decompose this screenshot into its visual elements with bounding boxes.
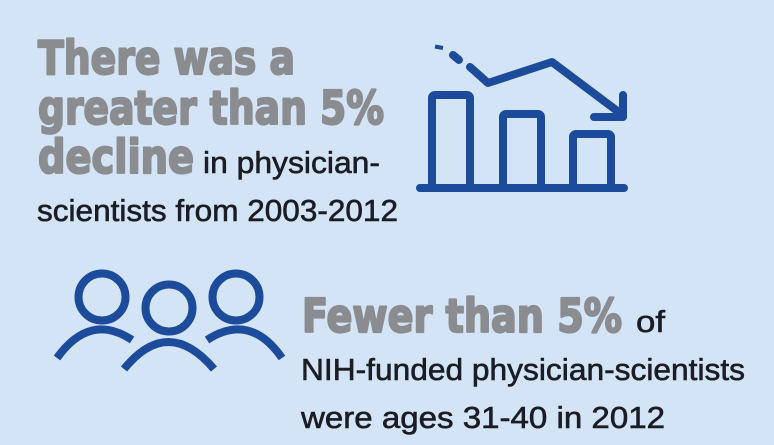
icon: declining bar chart with arrow xyxy=(420,46,624,188)
body text: were ages 31-40 in 2012: were ages 31-40 in 2012 xyxy=(300,400,665,435)
icon: group of three people xyxy=(57,274,282,369)
heading word: decline: decline xyxy=(38,130,194,184)
heading: Fewer than 5%: Fewer than 5% xyxy=(302,289,622,343)
body text: of: of xyxy=(636,304,665,339)
body text: scientists from 2003-2012: scientists from 2003-2012 xyxy=(37,193,398,228)
chart baseline xyxy=(420,184,624,192)
dashed trend start xyxy=(453,55,459,60)
trend tip fragment xyxy=(435,46,443,48)
person centre shoulders xyxy=(124,342,214,369)
text block: NIH-funded statistic xyxy=(300,289,745,435)
person left head xyxy=(78,274,126,320)
bar 1 xyxy=(432,95,470,188)
person left shoulders xyxy=(57,329,132,358)
heading line: There was a: There was a xyxy=(38,31,295,85)
heading line: greater than 5%: greater than 5% xyxy=(38,81,384,135)
trend arrow xyxy=(470,62,620,113)
person right shoulders xyxy=(207,329,282,358)
body text: NIH-funded physician-scientists: NIH-funded physician-scientists xyxy=(301,352,745,387)
body text: in physician-: in physician- xyxy=(203,145,380,180)
bar 3 xyxy=(573,134,611,188)
person right head xyxy=(212,274,260,320)
text block: decline statistic xyxy=(37,31,398,228)
person centre head xyxy=(146,284,192,332)
arrow head xyxy=(594,95,623,117)
bar 2 xyxy=(503,114,541,188)
